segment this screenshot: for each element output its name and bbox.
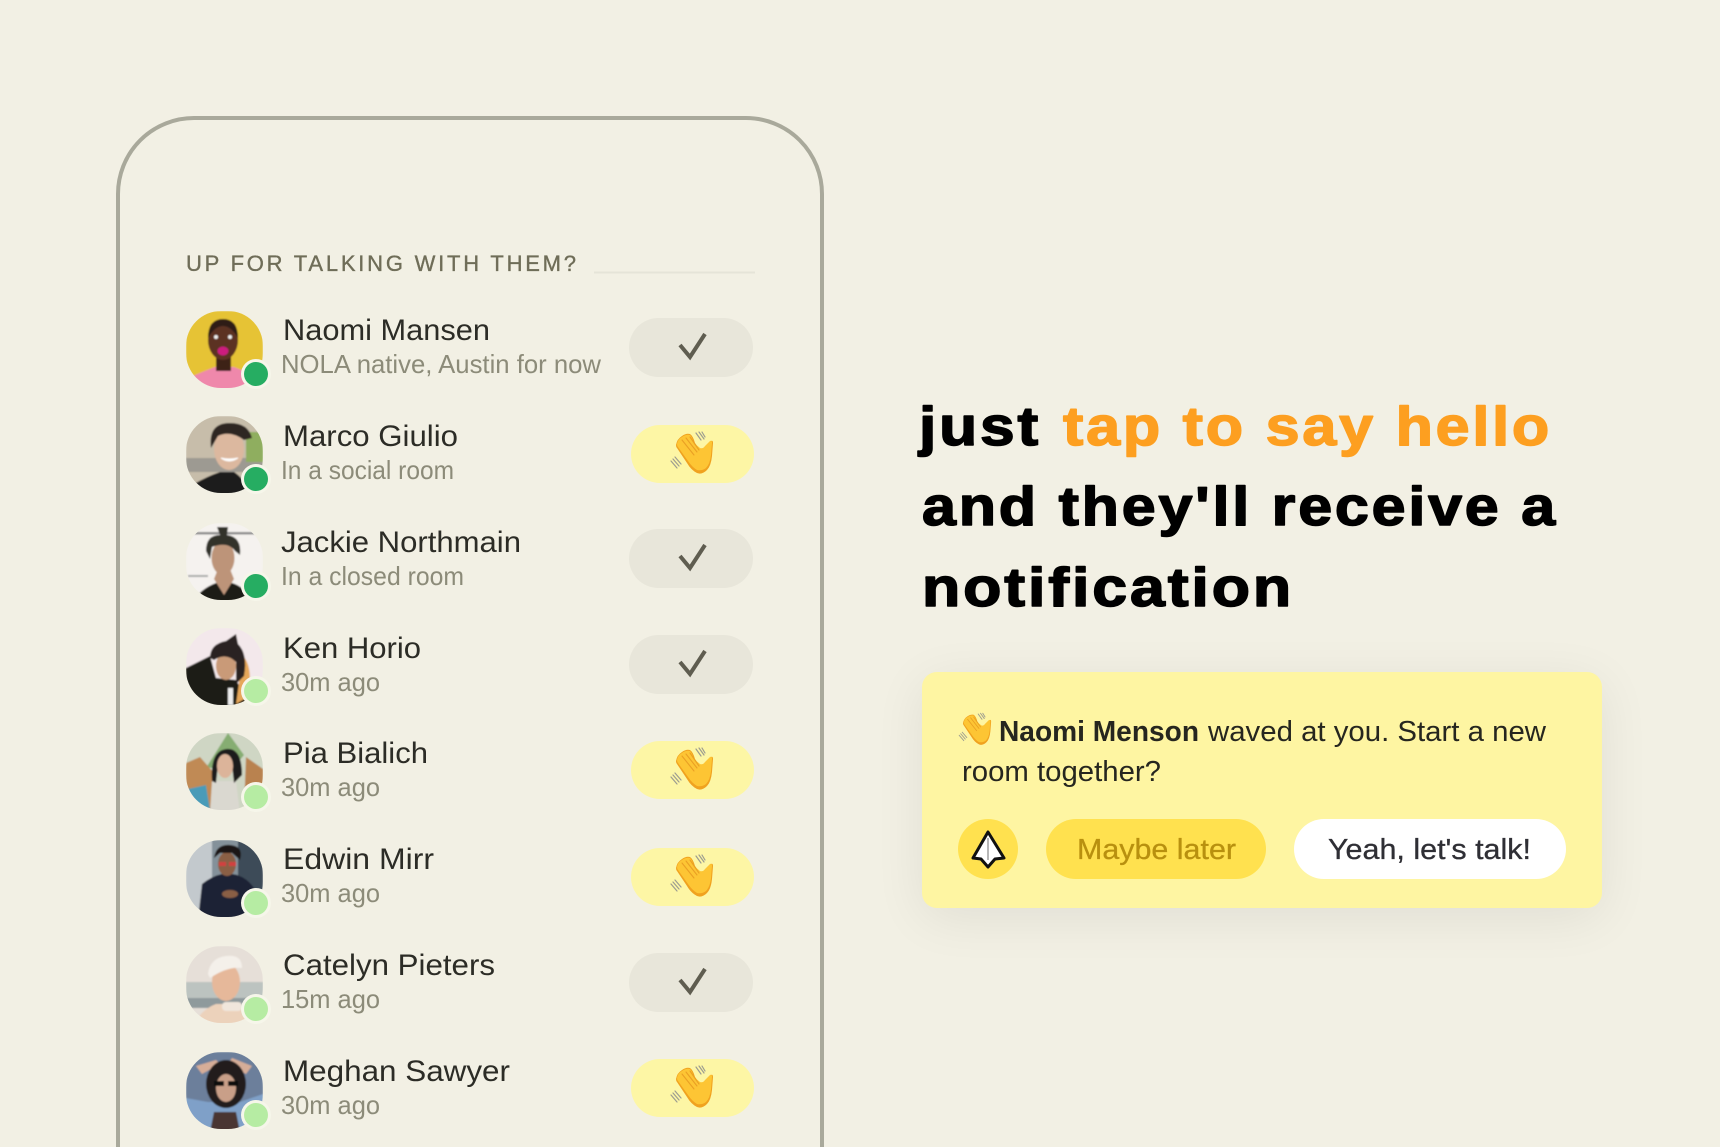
status: In a social room	[281, 455, 454, 485]
card shadow	[922, 682, 1602, 918]
name: Pia Bialich	[283, 737, 428, 770]
section heading: UP FOR TALKING WITH THEM?	[186, 251, 576, 276]
avatar: Jackie	[186, 523, 271, 603]
status: 30m ago	[281, 1090, 380, 1120]
button: check	[629, 529, 753, 588]
status: 30m ago	[281, 667, 380, 697]
button: wave	[631, 848, 754, 906]
avatar: Pia	[186, 733, 271, 813]
avatar: Ken	[186, 632, 268, 705]
name: Ken Horio	[283, 632, 421, 665]
phone outline	[118, 118, 822, 1147]
button: wave	[631, 1059, 754, 1117]
button: yeah let's talk: Yeah, let's talk!	[1328, 834, 1531, 866]
status: In a closed room	[281, 561, 464, 591]
avatar: Meghan	[186, 1052, 271, 1132]
row: Pia Bialich	[186, 733, 754, 813]
notification text: room together?	[962, 756, 1161, 788]
status: 15m ago	[281, 984, 380, 1014]
panel: contact list	[186, 251, 755, 1132]
row: Meghan Sawyer	[186, 1052, 754, 1132]
name: Edwin Mirr	[283, 843, 434, 876]
row: Edwin Mirr	[186, 840, 754, 920]
button: check	[629, 953, 753, 1012]
name: Catelyn Pieters	[283, 949, 495, 982]
row: Jackie Northmain	[186, 523, 753, 603]
row: Naomi Mansen	[186, 311, 753, 391]
status: 30m ago	[281, 772, 380, 802]
name: Naomi Mansen	[283, 314, 490, 347]
headline	[918, 395, 1558, 618]
status: NOLA native, Austin for now	[281, 349, 601, 379]
button: check	[629, 318, 753, 377]
name: Meghan Sawyer	[283, 1055, 510, 1088]
headline: and they'll receive a	[922, 475, 1558, 537]
button: wave	[631, 741, 754, 799]
avatar: Naomi	[186, 311, 271, 391]
row: Marco Giulio	[186, 416, 754, 496]
button: wave	[631, 425, 754, 483]
name: Jackie Northmain	[281, 526, 521, 559]
notification text: waved at you. Start a new	[1207, 716, 1547, 748]
button: check	[629, 635, 753, 694]
icon: small wave	[959, 713, 991, 745]
avatar: Marco	[186, 416, 271, 496]
headline: notification	[922, 556, 1294, 618]
button: yeah let's talk	[1294, 819, 1566, 879]
row: Ken Horio	[186, 628, 753, 708]
notification text: Naomi Menson	[999, 716, 1199, 748]
row: Catelyn Pieters	[186, 946, 753, 1026]
headline: just	[918, 395, 1041, 457]
panel: notification card	[922, 672, 1602, 908]
button: maybe later	[1046, 819, 1266, 879]
button: send icon	[958, 819, 1018, 879]
button: maybe later: Maybe later	[1077, 834, 1236, 866]
avatar: Catelyn	[186, 946, 271, 1026]
headline: tap to say hello	[1063, 395, 1552, 457]
status: 30m ago	[281, 878, 380, 908]
avatar: Edwin	[186, 840, 271, 920]
name: Marco Giulio	[283, 420, 458, 453]
